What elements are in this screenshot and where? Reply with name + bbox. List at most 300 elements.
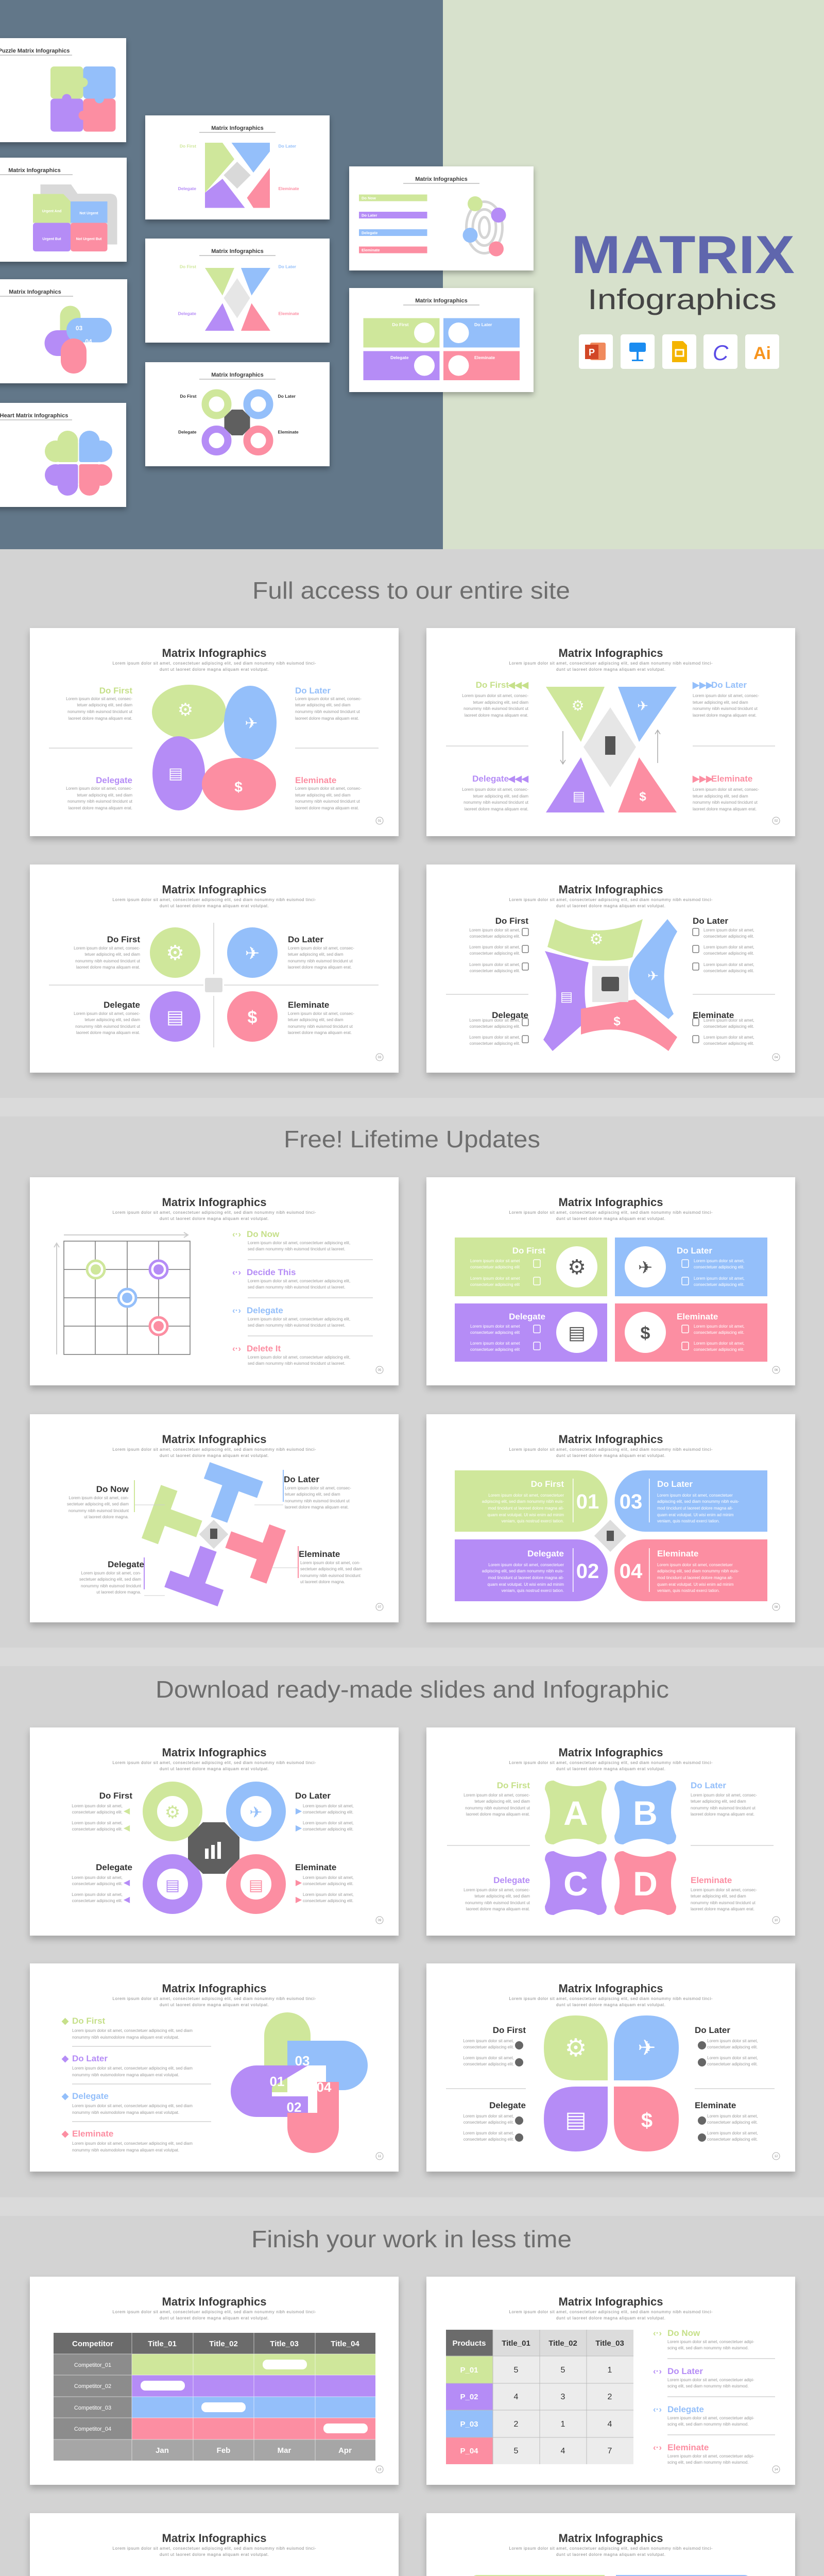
slide 10: ABCD blobs: B: [633, 1794, 658, 1832]
slide 5: grid matrix: sed diam nonummy nibh euismod tincidunt ut laoreet.: [248, 1285, 345, 1290]
slide 7: crossed T shapes: sectetuer adipiscing elit, sed diam: [79, 1577, 141, 1582]
slide 3: four circles with cross lines: 03: [378, 1056, 382, 1059]
slide 2: X shape: tetuer adipiscing elit, sed diam: [693, 794, 748, 799]
slide 3: four circles with cross lines: Delegate: [104, 1000, 140, 1010]
slide 4: curved bands: ▤: [560, 989, 573, 1004]
slide 1: swirl: tetuer adipiscing elit, sed diam: [295, 793, 351, 798]
slide 12: leaf blobs: Lorem ipsum dolor sit amet,: [463, 2131, 514, 2136]
slide 1: swirl: Matrix Infographics: [162, 647, 266, 659]
slide 1: swirl: Eleminate: [295, 775, 336, 785]
slide 10: ABCD blobs: laoreet dolore magna aliquam erat.: [466, 1907, 530, 1911]
slide 13: competitor table: Jan: [156, 2446, 169, 2455]
slide 3: four circles with cross lines: tetuer adipiscing elit, sed diam: [288, 1018, 344, 1022]
slide 6: four colored boxes: consectetuer adipiscing elit.: [694, 1265, 744, 1269]
slide 8: numbered pills: quam erat volutpat. Ut wisi enim ad minim: [487, 1582, 564, 1587]
slide 4: curved bands: 04: [775, 1056, 778, 1059]
slide 3: four circles with cross lines: laoreet dolore magna aliquam erat.: [288, 1030, 352, 1035]
slide 11: knot loop: ◆: [61, 2054, 69, 2063]
slide 14: products table: 4: [561, 2447, 565, 2455]
slide 6: four colored boxes: dunt ut laoreet dolore magna aliquam erat volutpat.: [556, 1216, 665, 1221]
slide 8: numbered pills: mod tincidunt ut laoreet dolore magna ali-: [657, 1506, 733, 1511]
slide 9: donut circles: Lorem ipsum dolor sit amet,: [303, 1892, 354, 1897]
slide 3: four circles with cross lines: tetuer adipiscing elit, sed diam: [84, 1018, 140, 1022]
slide 9: donut circles: consectetuer adipiscing elit.: [303, 1899, 353, 1903]
slide 6: four colored boxes: Do First: [512, 1246, 545, 1256]
slide 1: swirl: nonummy nibh euismod tincidunt ut: [67, 799, 133, 804]
slide 1: swirl: laoreet dolore magna aliquam erat.: [295, 806, 359, 810]
header mini slide: folder: Urgent But: [42, 238, 61, 241]
header mini slide: folder: Matrix Infographics: [8, 167, 61, 174]
icon: illustrator: Ai: [753, 344, 771, 363]
slide 7: crossed T shapes: ut laoreet dolore magna.: [96, 1590, 141, 1595]
slide 9: donut circles: ▶: [296, 1824, 302, 1833]
slide 8: numbered pills: quam erat volutpat. Ut wisi enim ad minim: [657, 1513, 734, 1517]
slide 11: knot loop: 11: [378, 2155, 382, 2158]
slide 12: leaf blobs: Lorem ipsum dolor sit amet,: [707, 2039, 758, 2043]
slide 7: crossed T shapes: Matrix Infographics: [162, 1433, 266, 1446]
slide 2: X shape: Lorem ipsum dolor sit amet, consectetuer adipiscing elit, sed diam nonummy nibh euismod tinci-: [509, 661, 713, 666]
slide 9: donut circles: ⚙: [165, 1803, 180, 1822]
slide 9: donut circles: consectetuer adipiscing elit.: [72, 1827, 123, 1832]
slide 1: swirl: laoreet dolore magna aliquam erat.: [295, 716, 359, 721]
header: app icons: [579, 334, 779, 369]
slide 4: curved bands: consectetuer adipiscing elit.: [703, 1024, 754, 1029]
slide 11: knot loop: 02: [287, 2099, 301, 2115]
slide 2: X shape: nonummy nibh euismod tincidunt ut: [464, 706, 529, 711]
slide 4: curved bands: Eleminate: [693, 1010, 734, 1020]
slide 2: X shape: Do First: [476, 680, 509, 690]
header mini slide: folder: Urgent And: [42, 210, 61, 213]
header mini slide: folder: Not Urgent: [79, 212, 98, 215]
slide 6: four colored boxes: consectetuer adipiscing elit.: [694, 1330, 744, 1335]
slide 10: ABCD blobs: Lorem ipsum dolor sit amet, consec-: [464, 1793, 530, 1798]
slide 10: ABCD blobs: tetuer adipiscing elit, sed diam: [474, 1799, 530, 1804]
header mini slide: four boxes: Eleminate: [474, 355, 495, 360]
slide 3: four circles with cross lines: laoreet dolore magna aliquam erat.: [76, 965, 140, 970]
slide 4: curved bands: consectetuer adipiscing elit.: [470, 969, 520, 973]
slide 14: products table: Matrix Infographics: [559, 2295, 663, 2308]
slide 6: four colored boxes: Lorem ipsum dolor sit amet,: [694, 1341, 745, 1346]
slide 9: donut circles: ▶: [296, 1878, 302, 1887]
slide 10: ABCD blobs: Delegate: [493, 1875, 530, 1885]
slide 9: donut circles: Lorem ipsum dolor sit amet,: [72, 1804, 123, 1808]
slide 13: competitor table: Competitor_01: [74, 2362, 111, 2368]
slide 12: leaf blobs: consectetuer adipiscing elit.: [707, 2062, 758, 2066]
slide 12: leaf blobs: [426, 1963, 795, 2172]
slide 10: ABCD blobs: laoreet dolore magna aliquam erat.: [691, 1812, 754, 1817]
slide 14: products table: 14: [775, 2468, 778, 2471]
slide 1: swirl: ✈: [245, 715, 258, 732]
icon: canva: [703, 334, 737, 369]
slide 14: products table: 1: [608, 2366, 612, 2375]
slide 6: four colored boxes: Lorem ipsum dolor sit amet, consectetuer adipiscing elit, sed diam nonummy nibh euismod tinci-: [509, 1210, 713, 1215]
slide 6: four colored boxes: Do Later: [677, 1246, 712, 1256]
slide 1: swirl: Lorem ipsum dolor sit amet, consec-: [66, 786, 132, 791]
slide 12: leaf blobs: $: [641, 2109, 653, 2132]
header mini slide: X shape: Matrix Infographics: [211, 248, 264, 255]
slide 7: crossed T shapes: tetuer adipiscing elit, sed diam: [285, 1492, 340, 1497]
header mini slide: diamond quadrants: Eleminate: [278, 186, 299, 191]
slide 8: numbered pills: Lorem ipsum dolor sit amet, consectetuer: [488, 1493, 564, 1498]
slide 11: knot loop: Do Later: [72, 2054, 108, 2063]
slide 13: competitor table: Competitor: [72, 2340, 113, 2348]
slide 2: X shape: Lorem ipsum dolor sit amet, consec-: [462, 693, 528, 698]
slide 3: four circles with cross lines: ⚙: [166, 942, 184, 964]
slide 11: knot loop: dunt ut laoreet dolore magna aliquam erat volutpat.: [160, 2003, 269, 2007]
slide 9: donut circles: 09: [378, 1919, 382, 1922]
slide 9: donut circles: Lorem ipsum dolor sit amet,: [303, 1804, 354, 1808]
slide 6: four colored boxes: Lorem ipsum dolor sit amet,: [694, 1276, 745, 1281]
slide 1: swirl: Delegate: [96, 775, 132, 785]
icon: powerpoint: P: [589, 347, 595, 358]
slide 3: four circles with cross lines: Lorem ipsum dolor sit amet, consec-: [288, 946, 354, 951]
slide 1: swirl: Lorem ipsum dolor sit amet, consec-: [295, 786, 362, 791]
slide 12: leaf blobs: ✈: [638, 2036, 656, 2060]
slide 8: numbered pills: adipiscing elit, sed diam nonummy nibh euis-: [482, 1569, 564, 1573]
slide 6: four colored boxes: consectetuer adipiscing elit: [470, 1265, 520, 1269]
slide 4: curved bands: Lorem ipsum dolor sit amet,: [469, 962, 520, 967]
slide 3: four circles with cross lines: Eleminate: [288, 1000, 329, 1010]
slide 7: crossed T shapes: [30, 1414, 399, 1622]
slide 7: crossed T shapes: laoreet dolore magna aliquam erat.: [285, 1505, 349, 1510]
slide 10: ABCD blobs: laoreet dolore magna aliquam erat.: [691, 1907, 754, 1911]
slide 11: knot loop: nonummy nibh euismodolore magna aliquam erat volutpat.: [72, 2073, 179, 2077]
slide 7: crossed T shapes: 07: [378, 1606, 382, 1609]
header mini slide: donuts: [145, 362, 330, 466]
slide 1: swirl: nonummy nibh euismod tincidunt ut: [67, 709, 133, 714]
header mini slide: donuts: Eleminate: [278, 430, 299, 435]
slide 1: swirl: laoreet dolore magna aliquam erat.: [68, 716, 132, 721]
slide 6: four colored boxes: 06: [775, 1369, 778, 1372]
slide 11: knot loop: Lorem ipsum dolor sit amet, consectetuer adipiscing elit, sed diam nonummy nibh euismod tinci-: [112, 1996, 316, 2001]
slide 8: numbered pills: mod tincidunt ut laoreet dolore magna ali-: [488, 1506, 564, 1511]
slide 8: numbered pills: 03: [620, 1490, 642, 1513]
slide 14: products table: Lorem ipsum dolor sit amet, consectetuer adipi-: [667, 2454, 754, 2459]
slide 6: four colored boxes: Lorem ipsum dolor sit amet: [470, 1276, 520, 1281]
slide 3: four circles with cross lines: Lorem ipsum dolor sit amet, consec-: [288, 1011, 354, 1016]
slide 8: numbered pills: 01: [576, 1490, 599, 1513]
slide 6: four colored boxes: ⚙: [568, 1256, 586, 1279]
slide 4: curved bands: $: [613, 1014, 621, 1028]
slide 7: crossed T shapes: Lorem ipsum dolor sit amet, consec-: [285, 1486, 351, 1490]
slide 9: donut circles: consectetuer adipiscing elit.: [303, 1827, 353, 1832]
slide 10: ABCD blobs: laoreet dolore magna aliquam erat.: [466, 1812, 530, 1817]
slide 5: grid matrix: ‹·›: [232, 1229, 241, 1239]
slide 11: knot loop: Eleminate: [72, 2129, 113, 2139]
slide 8: numbered pills: adipiscing elit, sed diam nonummy nibh euis-: [657, 1569, 740, 1573]
slide 12: leaf blobs: consectetuer adipiscing elit.: [464, 2137, 514, 2142]
slide 14: products table: Do Later: [667, 2366, 703, 2376]
slide 9: donut circles: consectetuer adipiscing elit.: [303, 1810, 353, 1815]
slide 12: leaf blobs: Matrix Infographics: [559, 1982, 663, 1995]
slide 14: products table: P_04: [460, 2447, 478, 2455]
header mini slide: fingerprint: Delegate: [362, 231, 377, 235]
header: left dark panel: [0, 0, 443, 549]
slide 6: four colored boxes: [426, 1177, 795, 1385]
slide 2: X shape: laoreet dolore magna aliquam erat.: [693, 713, 757, 718]
slide 9: donut circles: consectetuer adipiscing elit.: [72, 1810, 123, 1815]
slide 4: curved bands: Lorem ipsum dolor sit amet,: [469, 945, 520, 950]
slide 12: leaf blobs: consectetuer adipiscing elit.: [464, 2120, 514, 2125]
slide 4: curved bands: Do First: [495, 916, 528, 926]
slide 14: products table: P_01: [460, 2366, 478, 2375]
slide 9: donut circles: Lorem ipsum dolor sit amet,: [72, 1875, 123, 1880]
slide 10: ABCD blobs: nonummy nibh euismod tincidunt ut: [691, 1901, 756, 1905]
slide 7: crossed T shapes: nonummy nibh euismod tincidunt: [81, 1584, 142, 1588]
header mini slide: X shape: Delegate: [178, 311, 196, 316]
slide 8: numbered pills: quam erat volutpat. Ut wisi enim ad minim: [487, 1513, 564, 1517]
slide 1: swirl: [30, 628, 399, 836]
slide 2: X shape: laoreet dolore magna aliquam erat.: [693, 807, 757, 811]
slide 6: four colored boxes: Lorem ipsum dolor sit amet: [470, 1341, 520, 1346]
header mini slide: diamond quadrants: Do First: [180, 143, 196, 148]
slide 11: knot loop: 03: [295, 2053, 310, 2069]
slide 5: grid matrix: Delete It: [247, 1344, 281, 1353]
slide 7: crossed T shapes: ut laoreet dolore magna.: [300, 1580, 345, 1584]
header mini slide: diamond quadrants: [145, 115, 330, 219]
slide 5: grid matrix: Lorem ipsum dolor sit amet, consectetuer adipiscing elit, sed diam nonummy nibh euismod tinci-: [112, 1210, 316, 1215]
slide 14: products table: 5: [514, 2447, 519, 2455]
slide 13: competitor table: Feb: [217, 2446, 230, 2455]
slide 6: four colored boxes: Delegate: [509, 1312, 545, 1321]
slide 13: competitor table: [30, 2277, 399, 2485]
slide 13: competitor table: Competitor_03: [74, 2405, 111, 2411]
slide 10: ABCD blobs: nonummy nibh euismod tincidunt ut: [465, 1901, 530, 1905]
slide 13: competitor table: Title_02: [209, 2340, 238, 2348]
slide 12: leaf blobs: Eleminate: [695, 2100, 736, 2110]
slide 1: swirl: dunt ut laoreet dolore magna aliquam erat volutpat.: [160, 667, 269, 672]
slide 10: ABCD blobs: Do First: [497, 1781, 530, 1790]
header mini slide: folder: [0, 158, 127, 262]
heading 2: Free! Lifetime Updates: [284, 1126, 540, 1153]
slide 11: knot loop: ◆: [61, 2016, 69, 2026]
slide 10: ABCD blobs: 10: [775, 1919, 778, 1922]
slide 12: leaf blobs: consectetuer adipiscing elit.: [707, 2045, 758, 2049]
slide 3: four circles with cross lines: tetuer adipiscing elit, sed diam: [288, 952, 344, 957]
header mini slide: donuts: Do Later: [278, 394, 296, 399]
slide 14: products table: Products: [452, 2339, 486, 2348]
slide 14: products table: Lorem ipsum dolor sit amet, consectetuer adipiscing elit, sed diam nonummy nibh euismod tinci-: [509, 2310, 713, 2314]
slide 7: crossed T shapes: nonummy nibh euismod tincidunt: [300, 1573, 361, 1578]
slide 2: X shape: Delegate: [472, 774, 509, 784]
slide 13: competitor table: Matrix Infographics: [162, 2295, 266, 2308]
slide 8: numbered pills: Lorem ipsum dolor sit amet, consectetuer: [657, 1563, 733, 1567]
slide 12: leaf blobs: dunt ut laoreet dolore magna aliquam erat volutpat.: [556, 2003, 665, 2007]
slide 11: knot loop: nonummy nibh euismodolore magna aliquam erat volutpat.: [72, 2035, 179, 2040]
slide 9: donut circles: Lorem ipsum dolor sit amet,: [72, 1892, 123, 1897]
slide 3: four circles with cross lines: Lorem ipsum dolor sit amet, consec-: [74, 1011, 140, 1016]
slide 12: leaf blobs: Delegate: [489, 2100, 526, 2110]
slide 4: curved bands: Lorem ipsum dolor sit amet,: [469, 928, 520, 933]
slide 2: X shape: nonummy nibh euismod tincidunt ut: [693, 706, 758, 711]
slide 7: crossed T shapes: Eleminate: [299, 1549, 340, 1559]
slide 14: products table: 2: [608, 2393, 612, 2401]
slide 11: knot loop: Lorem ipsum dolor sit amet, consectetuer adipiscing elit, sed diam: [72, 2104, 193, 2108]
slide 9: donut circles: ◀: [124, 1807, 130, 1816]
slide 14: products table: scing elit, sed diam nonummy nibh euismod.: [667, 2384, 748, 2388]
slide 4: curved bands: dunt ut laoreet dolore magna aliquam erat volutpat.: [556, 904, 665, 908]
slide 13: competitor table: Lorem ipsum dolor sit amet, consectetuer adipiscing elit, sed diam nonummy nibh euismod tinci-: [112, 2310, 316, 2314]
slide 11: knot loop: ◆: [61, 2091, 69, 2101]
header mini slide: folder: Not Urgent But: [76, 238, 102, 241]
slide 3: four circles with cross lines: ✈: [245, 944, 260, 963]
slide 3: four circles with cross lines: $: [248, 1008, 258, 1027]
slide 4: curved bands: consectetuer adipiscing elit.: [470, 1041, 520, 1046]
slide 3: four circles with cross lines: Do First: [107, 935, 140, 944]
slide 11: knot loop: Delegate: [72, 2091, 109, 2101]
slide 9: donut circles: consectetuer adipiscing elit.: [303, 1882, 353, 1886]
slide 10: ABCD blobs: Lorem ipsum dolor sit amet, consectetuer adipiscing elit, sed diam nonummy nibh euismod tinci-: [509, 1760, 713, 1765]
slide 6: four colored boxes: consectetuer adipiscing elit.: [694, 1347, 744, 1352]
slide 12: leaf blobs: ⚙: [564, 2035, 587, 2062]
header mini slide: puzzle: Puzzle Matrix Infographics: [0, 48, 70, 54]
slide 8: numbered pills: Do Later: [657, 1479, 693, 1489]
slide 4: curved bands: Lorem ipsum dolor sit amet,: [703, 1018, 754, 1023]
slide 11: knot loop: nonummy nibh euismodolore magna aliquam erat volutpat.: [72, 2110, 179, 2115]
header mini slide: donuts: Do First: [180, 394, 197, 399]
header mini slide: diamond quadrants: Delegate: [178, 186, 196, 191]
slide 4: curved bands: Lorem ipsum dolor sit amet,: [469, 1035, 520, 1040]
slide 12: leaf blobs: consectetuer adipiscing elit.: [464, 2062, 514, 2066]
slide 5: grid matrix: Lorem ipsum dolor sit amet, consectetuer adipiscing elit,: [248, 1279, 350, 1283]
slide 11: knot loop: Do First: [72, 2016, 106, 2026]
slide 4: curved bands: consectetuer adipiscing elit.: [470, 934, 520, 939]
slide 6: four colored boxes: consectetuer adipiscing elit: [470, 1347, 520, 1352]
slide 12: leaf blobs: Lorem ipsum dolor sit amet,: [707, 2114, 758, 2119]
header title: MATRIX Infographics: MATRIX: [571, 227, 795, 285]
slide 14: products table: ‹·›: [653, 2328, 662, 2338]
slide 15: hub with four circles: Lorem ipsum dolor sit amet, consectetuer adipiscing elit, sed diam nonummy nibh euismod tinci-: [112, 2546, 316, 2551]
slide 12: leaf blobs: consectetuer adipiscing elit.: [464, 2045, 514, 2049]
slide 8: numbered pills: 08: [775, 1606, 778, 1609]
slide 3: four circles with cross lines: tetuer adipiscing elit, sed diam: [84, 952, 140, 957]
slide 7: crossed T shapes: Do Now: [96, 1484, 129, 1494]
slide 15: hub with four circles: [30, 2513, 399, 2576]
slide 2: X shape: laoreet dolore magna aliquam erat.: [465, 713, 528, 718]
section bands: [0, 1098, 824, 1116]
slide 3: four circles with cross lines: [30, 865, 399, 1073]
slide 14: products table: Do Now: [667, 2328, 700, 2338]
slide 14: products table: Lorem ipsum dolor sit amet, consectetuer adipi-: [667, 2416, 754, 2420]
slide 9: donut circles: ◀: [124, 1824, 130, 1833]
slide 9: donut circles: Eleminate: [295, 1862, 336, 1872]
header mini slide: X shape: Do Later: [278, 264, 297, 269]
slide 10: ABCD blobs: tetuer adipiscing elit, sed diam: [474, 1894, 530, 1899]
slide 8: numbered pills: quam erat volutpat. Ut wisi enim ad minim: [657, 1582, 734, 1587]
slide 14: products table: 3: [561, 2393, 565, 2401]
slide 9: donut circles: Lorem ipsum dolor sit amet,: [303, 1821, 354, 1825]
slide 14: products table: ‹·›: [653, 2404, 662, 2414]
slide 14: products table: 4: [608, 2420, 612, 2429]
slide 4: curved bands: Lorem ipsum dolor sit amet,: [703, 928, 754, 933]
slide 10: ABCD blobs: [426, 1727, 795, 1936]
slide 10: ABCD blobs: Lorem ipsum dolor sit amet, consec-: [691, 1888, 757, 1892]
slide 4: curved bands: Lorem ipsum dolor sit amet,: [469, 1018, 520, 1023]
slide 4: curved bands: Lorem ipsum dolor sit amet,: [703, 962, 754, 967]
header mini slide: heart: [0, 403, 126, 507]
slide 3: four circles with cross lines: laoreet dolore magna aliquam erat.: [76, 1030, 140, 1035]
slide 10: ABCD blobs: Eleminate: [691, 1875, 732, 1885]
slide 1: swirl: tetuer adipiscing elit, sed diam: [77, 793, 132, 798]
header mini slide: fingerprint: Do Now: [362, 196, 376, 200]
slide 9: donut circles: Lorem ipsum dolor sit amet,: [303, 1875, 354, 1880]
slide 4: curved bands: consectetuer adipiscing elit.: [470, 951, 520, 956]
slide 10: ABCD blobs: dunt ut laoreet dolore magna aliquam erat volutpat.: [556, 1767, 665, 1771]
slide 14: products table: 1: [561, 2420, 565, 2429]
header mini slide: four boxes: Do First: [392, 322, 409, 327]
slide 12: leaf blobs: Lorem ipsum dolor sit amet,: [707, 2131, 758, 2136]
slide 2: X shape: Matrix Infographics: [559, 647, 663, 659]
slide 9: donut circles: ▤: [249, 1877, 263, 1894]
slide 8: numbered pills: veniam, quis nostrud exerci tation.: [657, 1519, 719, 1523]
slide 13: competitor table: Title_01: [148, 2340, 177, 2348]
slide 9: donut circles: Delegate: [96, 1862, 132, 1872]
slide 2: X shape: tetuer adipiscing elit, sed diam: [693, 700, 748, 705]
slide 6: four colored boxes: Lorem ipsum dolor sit amet: [470, 1259, 520, 1263]
slide 2: X shape: dunt ut laoreet dolore magna aliquam erat volutpat.: [556, 667, 665, 672]
slide 4: curved bands: Do Later: [693, 916, 728, 926]
slide 8: numbered pills: veniam, quis nostrud exerci tation.: [657, 1588, 719, 1593]
slide 6: four colored boxes: consectetuer adipiscing elit: [470, 1282, 520, 1287]
slide 1: swirl: tetuer adipiscing elit, sed diam: [295, 703, 351, 707]
slide 8: numbered pills: Matrix Infographics: [559, 1433, 663, 1446]
slide 7: crossed T shapes: nonummy nibh euismod tincidunt: [68, 1509, 129, 1513]
slide 14: products table: scing elit, sed diam nonummy nibh euismod.: [667, 2422, 748, 2427]
slide 10: ABCD blobs: nonummy nibh euismod tincidunt ut: [691, 1806, 756, 1810]
slide 14: products table: 5: [514, 2366, 519, 2375]
slide 5: grid matrix: [30, 1177, 399, 1385]
slide 9: donut circles: Lorem ipsum dolor sit amet,: [72, 1821, 123, 1825]
slide 2: X shape: nonummy nibh euismod tincidunt ut: [464, 800, 529, 805]
slide 15: hub with four circles: Matrix Infographics: [162, 2532, 266, 2545]
slide 16: rounded boxes with diamond: [426, 2513, 795, 2576]
slide 13: competitor table: Competitor_04: [74, 2426, 111, 2432]
slide 9: donut circles: Do First: [99, 1791, 132, 1801]
slide 13: competitor table: dunt ut laoreet dolore magna aliquam erat volutpat.: [160, 2316, 269, 2320]
slide 13: competitor table: Apr: [338, 2446, 352, 2455]
slide 5: grid matrix: dunt ut laoreet dolore magna aliquam erat volutpat.: [160, 1216, 269, 1221]
slide 8: numbered pills: [426, 1414, 795, 1622]
slide 7: crossed T shapes: Delegate: [108, 1560, 144, 1569]
slide 1: swirl: nonummy nibh euismod tincidunt ut: [295, 799, 360, 804]
slide 5: grid matrix: sed diam nonummy nibh euismod tincidunt ut laoreet.: [248, 1247, 345, 1251]
slide 13: competitor table: Mar: [278, 2446, 291, 2455]
slide 9: donut circles: ▶: [296, 1807, 302, 1816]
slide 12: leaf blobs: Lorem ipsum dolor sit amet, consectetuer adipiscing elit, sed diam nonummy nibh euismod tinci-: [509, 1996, 713, 2001]
slide 9: donut circles: Matrix Infographics: [162, 1746, 266, 1759]
slide 8: numbered pills: 04: [620, 1560, 643, 1583]
slide 14: products table: Lorem ipsum dolor sit amet, consectetuer adipi-: [667, 2340, 754, 2344]
slide 4: curved bands: Delegate: [492, 1010, 528, 1020]
slide 3: four circles with cross lines: dunt ut laoreet dolore magna aliquam erat volutpat.: [160, 904, 269, 908]
header mini slide: heart: Heart Matrix Infographics: [0, 413, 68, 419]
slide 12: leaf blobs: Lorem ipsum dolor sit amet,: [463, 2039, 514, 2043]
slide 14: products table: Delegate: [667, 2404, 704, 2414]
header: right sage panel: [443, 0, 824, 549]
slide 2: X shape: $: [639, 790, 646, 804]
slide 10: ABCD blobs: Matrix Infographics: [559, 1746, 663, 1759]
slide 5: grid matrix: ‹·›: [232, 1267, 241, 1277]
slide 3: four circles with cross lines: Do Later: [288, 935, 323, 944]
slide 11: knot loop: Lorem ipsum dolor sit amet, consectetuer adipiscing elit, sed diam: [72, 2066, 193, 2071]
slide 1: swirl: nonummy nibh euismod tincidunt ut: [295, 709, 360, 714]
icon: powerpoint: [579, 334, 613, 369]
slide 5: grid matrix: ‹·›: [232, 1306, 241, 1315]
slide 13: competitor table: Title_03: [270, 2340, 299, 2348]
slide 11: knot loop: Matrix Infographics: [162, 1982, 266, 1995]
slide 2: X shape: tetuer adipiscing elit, sed diam: [473, 794, 528, 799]
slide 14: products table: [426, 2277, 795, 2485]
